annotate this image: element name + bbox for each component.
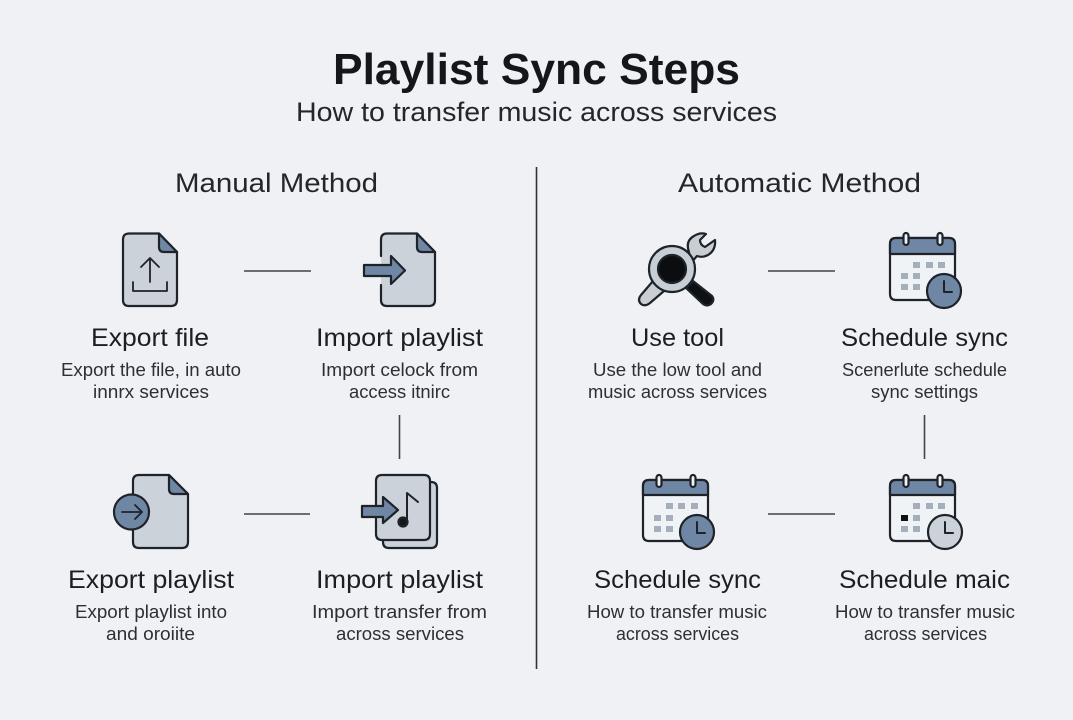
- icon: calendar with clock: [890, 233, 961, 308]
- title: Playlist Sync Steps: [333, 45, 740, 94]
- description: export file: Export the file, in auto: [61, 360, 241, 380]
- step: export file: [61, 234, 241, 402]
- icon: document with incoming arrow: [364, 234, 435, 306]
- panel: manual method: [61, 168, 487, 644]
- step: import playlist top: [316, 234, 483, 402]
- description: schedule sync: Scenerlute schedule: [842, 360, 1007, 380]
- label: export playlist: Export playlist: [68, 566, 234, 594]
- connector: schedule sync to schedule maic bottom: [768, 513, 835, 515]
- heading: automatic method: Automatic Method: [678, 168, 921, 198]
- label: schedule maic: Schedule maic: [839, 566, 1010, 594]
- center divider: [536, 167, 538, 669]
- connector: export file to import playlist: [244, 270, 311, 272]
- panel: automatic method: [587, 168, 1015, 644]
- description: export playlist: Export playlist into: [75, 602, 227, 622]
- step: import playlist bottom: [312, 475, 487, 644]
- icon: calendar with clock: [643, 475, 714, 549]
- icon: calendar with light clock: [890, 475, 962, 549]
- description: export playlist: and oroiite: [106, 624, 195, 644]
- step: schedule maic: [835, 475, 1015, 644]
- connector: export playlist to import playlist: [244, 513, 310, 515]
- icon: document with arrow badge: [114, 475, 188, 548]
- description: import transfer: [312, 602, 487, 644]
- description: export file: [61, 360, 241, 402]
- description: schedule sync: across services: [616, 624, 739, 644]
- description: schedule maic: across services: [864, 624, 987, 644]
- icon: document with upload arrow: [123, 234, 177, 306]
- step: use tool: [588, 233, 767, 402]
- description: export playlist: [75, 602, 227, 644]
- label: schedule sync: Schedule sync: [594, 566, 761, 594]
- label: export file: Export file: [91, 324, 209, 352]
- description: import transfer: across services: [336, 624, 464, 644]
- description: schedule maic: How to transfer music: [835, 602, 1015, 622]
- description: schedule sync: [842, 360, 1007, 402]
- icon: magnifier and wrench: [639, 233, 715, 306]
- connector: import playlist to import playlist: [398, 415, 400, 459]
- heading: manual method: Manual Method: [175, 168, 378, 198]
- description: export file: innrx services: [93, 382, 209, 402]
- description: schedule sync: How to transfer music: [587, 602, 767, 622]
- step: schedule sync top: [841, 233, 1008, 402]
- connector: use tool to schedule sync: [768, 270, 835, 272]
- connector: schedule sync to schedule maic: [924, 415, 926, 459]
- icon: stacked documents with music note: [362, 475, 437, 548]
- description: import playlist: access itnirc: [349, 382, 450, 402]
- description: schedule sync: sync settings: [871, 382, 978, 402]
- description: schedule sync: [587, 602, 767, 644]
- description: schedule maic: [835, 602, 1015, 644]
- description: use tool: [588, 360, 767, 402]
- subtitle: How to transfer music across services: [296, 97, 777, 127]
- step: export playlist: [68, 475, 234, 644]
- label: schedule sync: Schedule sync: [841, 324, 1008, 352]
- step: schedule sync bottom: [587, 475, 767, 644]
- label: import playlist: Import playlist: [316, 566, 483, 594]
- description: use tool: Use the low tool and: [593, 360, 762, 380]
- description: import playlist: Import celock from: [321, 360, 478, 380]
- label: import playlist: Import playlist: [316, 324, 483, 352]
- label: use tool: Use tool: [631, 324, 724, 352]
- description: use tool: music across services: [588, 382, 767, 402]
- description: import transfer: Import transfer from: [312, 602, 487, 622]
- description: import playlist: [321, 360, 478, 402]
